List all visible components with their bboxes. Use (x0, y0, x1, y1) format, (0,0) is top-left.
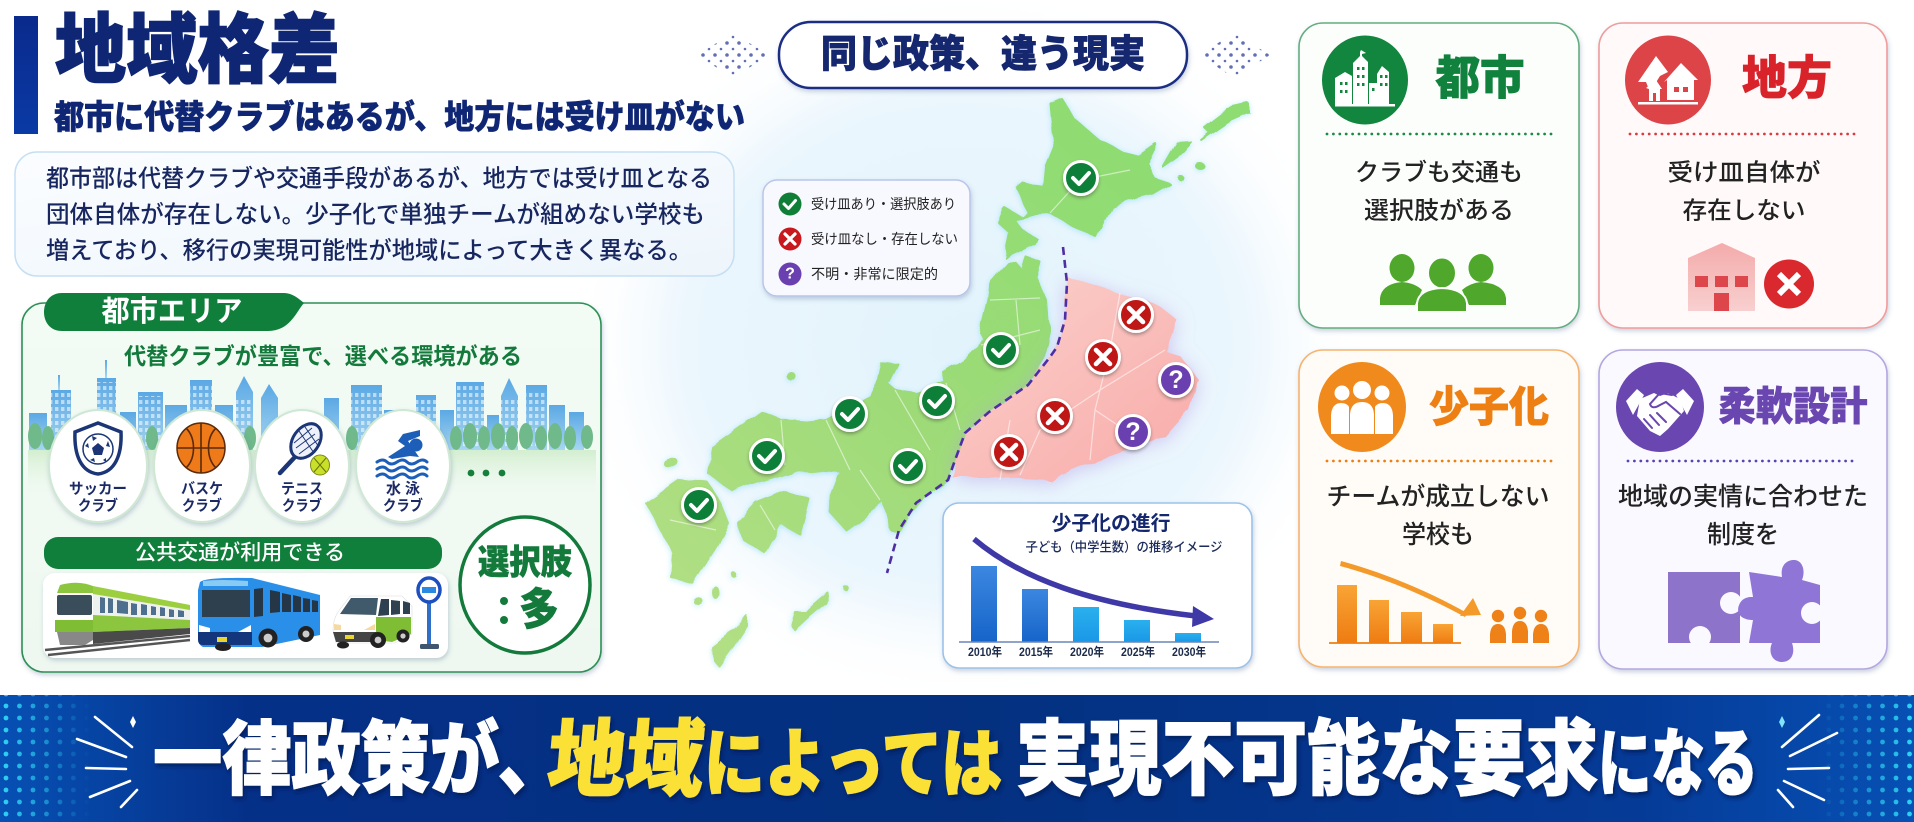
purple unknown markers: ? (1125, 418, 1141, 446)
central heading pill: 同じ政策、違う現実 (821, 34, 1145, 76)
green check markers (682, 162, 1098, 522)
card: flexible design (1599, 350, 1887, 669)
purple unknown markers (1116, 364, 1192, 448)
map: red regions (952, 277, 1199, 480)
bar chart: 2020年 (1070, 644, 1104, 659)
card: rural: 受け皿自体が (1668, 160, 1820, 186)
club: swimming: 水泳 (386, 480, 420, 498)
panel: summary text: 増えており、移行の実現可能性が地域によって大きく異なる。 (46, 238, 692, 264)
panel: declining birthrate chart: 少子化の進行 (1052, 512, 1170, 535)
regional divide dashed line (887, 247, 1067, 573)
banner text: になる (1598, 722, 1758, 806)
card: city: 選択肢がある (1364, 198, 1514, 224)
map: green regions (646, 98, 1248, 665)
red cross markers (992, 298, 1152, 468)
card: flexible design: 柔軟設計 (1718, 385, 1868, 429)
icon: city buildings (1322, 36, 1408, 124)
bar chart: 2025年 (1121, 644, 1155, 659)
legend: unknown: 不明・非常に限定的 (811, 266, 938, 282)
header: title block (14, 8, 745, 136)
urban panel subheading: 代替クラブが豊富で、選べる環境がある (124, 343, 522, 369)
panel: summary text: 都市部は代替クラブや交通手段があるが、地方では受け皿となる (46, 164, 712, 192)
tab: urban area heading: 都市エリア (102, 295, 242, 328)
banner: key conclusion (0, 695, 1914, 822)
club: soccer (49, 410, 147, 522)
club: soccer: サッカー (69, 480, 127, 498)
legend: available: 受け皿あり・選択肢あり (811, 196, 956, 212)
bar chart: 2015年 (1019, 644, 1053, 659)
card: city: クラブも交通も (1355, 158, 1523, 186)
legend: not available: 受け皿なし・存在しない (811, 231, 958, 247)
club: tennis (255, 410, 349, 522)
banner text: によっては (704, 722, 1002, 806)
legend: not available (778, 228, 958, 250)
card: flexible design: 制度を (1707, 521, 1779, 549)
arrow: downward trend (974, 539, 1214, 627)
icon: basketball (177, 423, 225, 473)
icon: decline chart and people (1329, 561, 1549, 643)
banner text: 地域 (544, 713, 708, 807)
club: tennis: テニス (281, 480, 323, 498)
bar chart (959, 566, 1219, 659)
club: basketball: クラブ (182, 496, 222, 514)
card: rural (1599, 23, 1887, 328)
legend: available (778, 192, 956, 216)
decorative dot clusters (697, 33, 1270, 78)
card: rural: 存在しない (1682, 198, 1806, 224)
club: basketball: バスケ (181, 480, 223, 498)
card: declining birthrate: 少子化 (1429, 384, 1549, 430)
bar chart: 2030年 (1172, 644, 1206, 659)
card: declining birthrate (1299, 350, 1579, 667)
icon: handshake (1616, 362, 1704, 452)
card: city (1299, 23, 1579, 328)
club: basketball (154, 410, 250, 522)
more clubs ellipsis dots (468, 470, 505, 476)
icon: swimmer (377, 430, 427, 478)
card: declining birthrate: 学校も (1402, 521, 1474, 549)
club: tennis: クラブ (282, 496, 322, 514)
icon: soccer shield (75, 423, 121, 474)
legend: unknown: ? (785, 266, 795, 282)
callout: many choices (460, 517, 590, 653)
panel: summary text (15, 152, 734, 276)
legend: unknown (778, 262, 938, 286)
prefecture borders (670, 170, 1165, 530)
banner text (153, 713, 1758, 807)
club: swimming (356, 410, 450, 522)
card: rural: 地方 (1742, 52, 1832, 104)
card: flexible design: 地域の実情に合わせた (1618, 483, 1868, 511)
icon: mountain and house (1625, 36, 1711, 124)
legend (763, 180, 970, 296)
map of Japan (646, 98, 1248, 665)
icon: people group (1380, 254, 1506, 312)
card: city: 都市 (1436, 52, 1524, 104)
panel: declining birthrate chart: 子ども（中学生数）の推移イメージ (1026, 540, 1222, 554)
panel: declining birthrate chart (943, 503, 1252, 668)
public transit bar (44, 537, 442, 569)
club: soccer: クラブ (78, 496, 118, 514)
icon: bus (198, 578, 320, 651)
burst lines left (77, 716, 137, 807)
icon: family group (1318, 362, 1406, 452)
icon: train (45, 583, 190, 655)
callout: many choices: 選択肢 (478, 544, 572, 582)
icon: no facility (1688, 243, 1814, 311)
city skyline illustration (28, 360, 596, 500)
icon: community van (333, 596, 412, 648)
panel: summary text: 団体自体が存在しない。少子化で単独チームが組めない学校も (46, 202, 705, 228)
icon: bus stop (418, 578, 440, 649)
banner text: 実現不可能な要求 (1016, 714, 1598, 806)
icon: puzzle pieces (1668, 560, 1823, 662)
panel: urban area (22, 293, 601, 672)
central heading pill (697, 22, 1270, 88)
card: declining birthrate: チームが成立しない (1326, 483, 1550, 511)
subtitle: 都市に代替クラブはあるが、地方には受け皿がない (54, 98, 745, 136)
title: 地域格差 (55, 8, 340, 94)
banner text: 一律政策が、 (153, 716, 567, 804)
callout: many choices: 多 (519, 586, 559, 634)
public transit bar: 公共交通が利用できる (135, 542, 345, 564)
bar chart: 2010年 (968, 644, 1002, 659)
icon: tennis racket and ball (280, 418, 330, 475)
purple unknown markers: ? (1168, 366, 1184, 394)
decorative cyan dot grids (0, 695, 1914, 822)
transit vehicles panel (43, 573, 448, 658)
club: swimming: クラブ (383, 496, 423, 514)
burst lines right (1778, 715, 1837, 807)
tab: urban area heading (44, 293, 304, 331)
title accent bar (14, 16, 38, 134)
